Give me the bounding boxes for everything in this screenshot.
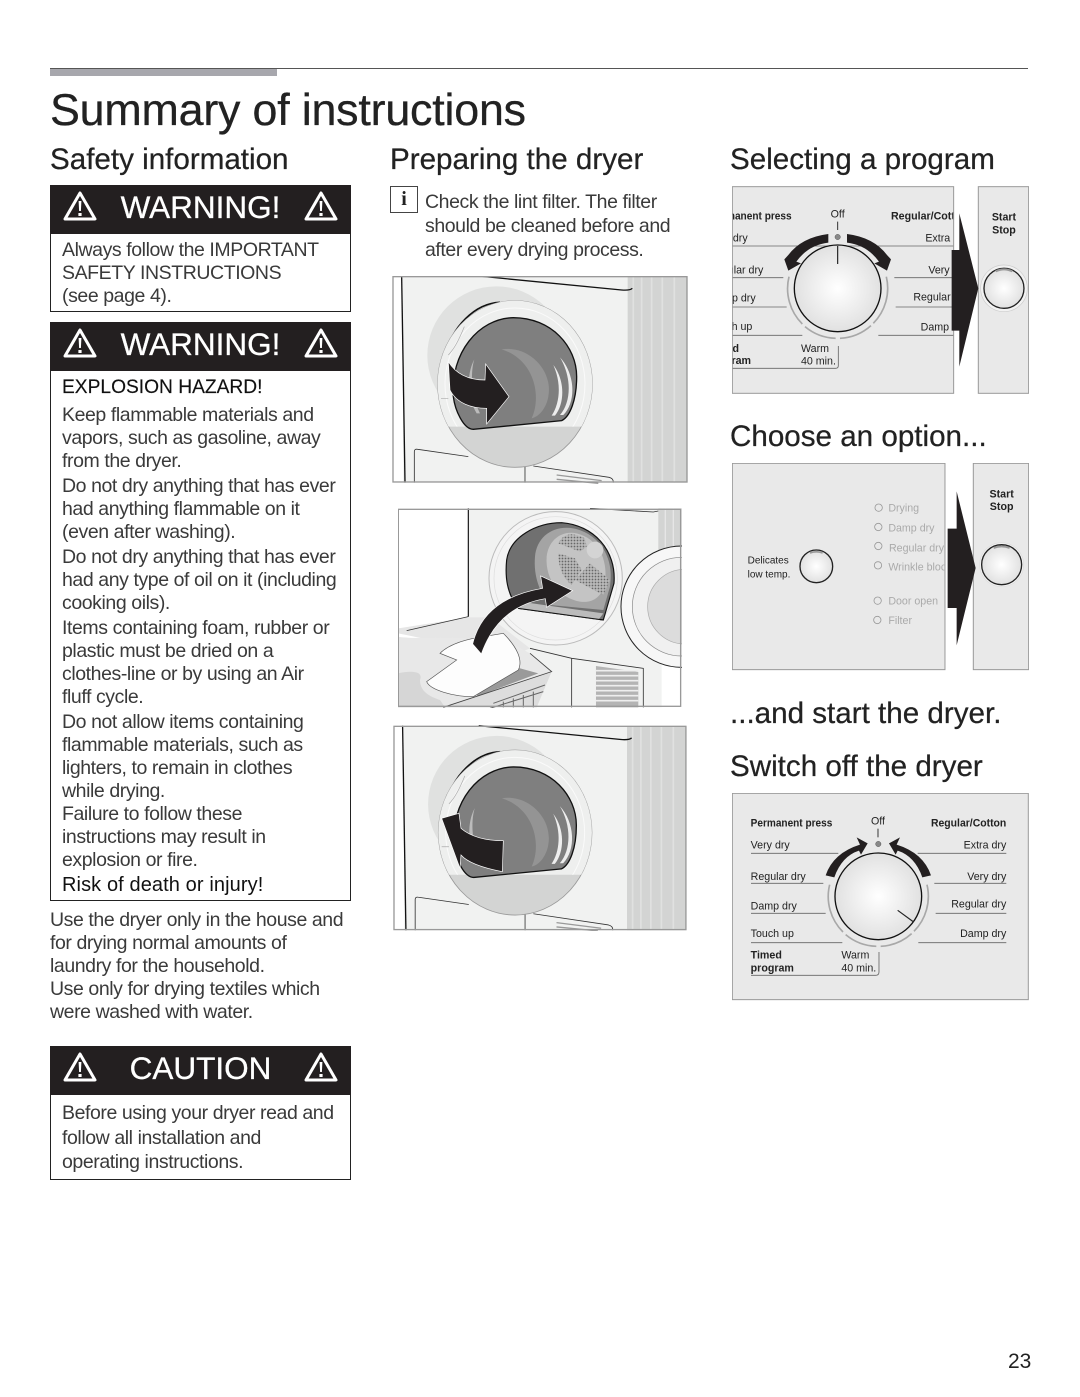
- paragraph: flammable materials: Keep flammable materials and: [62, 404, 314, 426]
- paragraph: flammable on it: had anything flammable on it: [62, 498, 300, 520]
- paragraph: flammable on it: Do not dry anything that has ever: [62, 475, 335, 497]
- panel: explosion hazard warning: [50, 322, 351, 901]
- panel: selecting a program control: [732, 186, 1029, 394]
- paragraph: oil: [62, 546, 336, 614]
- text block: intended use: laundry for the household.: [50, 955, 265, 977]
- text block: lint filter: Check the lint filter. The filter: [425, 191, 657, 213]
- text block: lint filter: after every drying process.: [425, 239, 643, 261]
- panel: switch off control: Permanent press: [751, 818, 832, 830]
- paragraph: failure: instructions may result in: [62, 826, 266, 848]
- panel: switch off control: 40 min.: [841, 962, 876, 974]
- warning text: SAFETY INSTRUCTIONS: [62, 262, 281, 284]
- paragraph: oil: had any type of oil on it (including: [62, 569, 336, 591]
- paragraph: lighters: Do not allow items containing: [62, 711, 303, 733]
- dial panel: Regular dry: [913, 292, 969, 304]
- panel: switch off control: program: [751, 962, 794, 974]
- paragraph: foam and rubber: plastic must be dried on a: [62, 640, 273, 662]
- paragraph: foam and rubber: Items containing foam, rubber or: [62, 617, 329, 639]
- panel: option control: Regular dry: [889, 543, 945, 555]
- caution text: follow all installation and: [62, 1126, 261, 1148]
- heading: safety information: Safety information: [50, 143, 289, 176]
- paragraph: lighters: [62, 711, 303, 802]
- heading: preparing the dryer: Preparing the dryer: [390, 143, 643, 176]
- heading: choose an option: Choose an option...: [730, 420, 987, 453]
- panel: switch off control: Very dry: [967, 871, 1007, 883]
- caution text: operating instructions.: [62, 1151, 243, 1173]
- caution header: [50, 1046, 351, 1095]
- text block: lint filter: [425, 191, 670, 261]
- arrow: right: [448, 362, 509, 424]
- panel: switch off control: Damp dry: [751, 900, 798, 912]
- arrow: left: [442, 813, 503, 872]
- panel: switch off control: Touch up: [751, 928, 794, 940]
- caution header: CAUTION: [130, 1050, 271, 1086]
- warning text: [62, 239, 319, 307]
- paragraph: failure: [62, 803, 266, 871]
- caution text: [62, 1102, 334, 1173]
- paragraph: oil: Do not dry anything that has ever: [62, 546, 335, 568]
- text block: lint filter: should be cleaned before and: [425, 215, 670, 237]
- paragraph: failure: Failure to follow these: [62, 803, 242, 825]
- paragraph: flammable materials: [62, 404, 321, 472]
- text block: intended use: Use the dryer only in the house and: [50, 909, 343, 931]
- paragraph: lighters: flammable materials, such as: [62, 734, 303, 756]
- panel: option control: Filter: [888, 615, 912, 627]
- panel: option control: Damp dry: [888, 522, 935, 534]
- panel: switch off control: Timed: [751, 949, 782, 961]
- text block: intended use: Use only for drying textiles which: [50, 978, 320, 1000]
- heading: and start the dryer: ...and start the dryer.: [730, 697, 1001, 730]
- panel: switch off control: [732, 793, 1029, 1000]
- panel: switch off control: Regular dry: [751, 871, 806, 883]
- paragraph: lighters: lighters, to remain in clothes: [62, 757, 292, 779]
- paragraph: foam and rubber: fluff cycle.: [62, 686, 143, 708]
- panel: switch off control: Damp dry: [960, 928, 1007, 940]
- panel: option control: Delicates: [748, 555, 789, 566]
- illustration: loading laundry: [398, 508, 682, 708]
- panel: selecting a program control: Start: [992, 212, 1017, 224]
- page number: 23: [1008, 1350, 1031, 1373]
- dial panel: Very dry: [928, 264, 968, 276]
- panel: caution: [50, 1046, 351, 1180]
- heading: switch off the dryer: Switch off the dryer: [730, 750, 983, 783]
- warning text: Always follow the IMPORTANT: [62, 239, 319, 261]
- illustration: open door, arrow to the right: [392, 276, 688, 484]
- dial panel: Extra dry: [925, 233, 969, 245]
- panel: option control: Door open: [888, 596, 938, 608]
- panel: switch off control: Warm: [841, 949, 869, 961]
- dial panel: Regular/Cotton: [891, 210, 968, 222]
- warning header: WARNING!: [121, 326, 280, 362]
- risk of death: Risk of death or injury!: [62, 874, 263, 896]
- illustration: closing door, arrow to the left: [393, 725, 687, 931]
- dial panel: Damp dry: [921, 322, 968, 334]
- panel: switch off control: Regular dry: [951, 898, 1007, 910]
- panel: switch off control: Very dry: [751, 840, 790, 852]
- arrow: to start: [952, 213, 978, 367]
- panel: option control: Stop: [990, 501, 1014, 513]
- arrow: to start: [948, 491, 976, 645]
- top rule: [50, 68, 1028, 76]
- dial panel: Warm: [801, 343, 829, 355]
- panel: switch off control: Off: [871, 816, 885, 828]
- warning header: [50, 322, 351, 371]
- warning text: (see page 4).: [62, 285, 171, 307]
- start panel: [978, 187, 1029, 393]
- text block: intended use: [50, 909, 343, 1023]
- paragraph: flammable on it: (even after washing).: [62, 521, 235, 543]
- warning header: [50, 185, 351, 234]
- title: Summary of instructions: [50, 85, 526, 135]
- paragraph: lighters: while drying.: [62, 780, 165, 802]
- panel: switch off control: Regular/Cotton: [931, 818, 1006, 830]
- paragraph: flammable on it: [62, 475, 336, 543]
- explosion hazard heading: EXPLOSION HAZARD!: [62, 377, 262, 398]
- text block: intended use: were washed with water.: [50, 1001, 253, 1023]
- panel: warning 1: [50, 185, 351, 312]
- panel: option control: Start: [989, 488, 1014, 500]
- panel: switch off control: Extra dry: [964, 840, 1007, 852]
- heading: selecting a program: Selecting a program: [730, 143, 995, 176]
- panel: option control: [732, 463, 1029, 670]
- icon: info box: i: [401, 188, 407, 210]
- text block: intended use: for drying normal amounts of: [50, 932, 286, 954]
- panel: selecting a program control: Stop: [992, 224, 1016, 236]
- icon: info box: [390, 186, 418, 213]
- panel: option control: Drying: [888, 502, 919, 514]
- dial panel: 40 min.: [801, 355, 836, 367]
- dial panel: [732, 187, 969, 393]
- caution text: Before using your dryer read and: [62, 1102, 334, 1124]
- panel: option control: Wrinkle block: [888, 562, 952, 574]
- warning header: WARNING!: [121, 189, 280, 225]
- dial panel: Off: [831, 209, 845, 221]
- paragraph: flammable materials: vapors, such as gasoline, away: [62, 427, 320, 449]
- paragraph: foam and rubber: clothes-line or by using an Air: [62, 663, 304, 685]
- paragraph: foam and rubber: [62, 617, 330, 708]
- arrow: into drum: [473, 576, 573, 654]
- panel: option control: low temp.: [748, 570, 790, 581]
- paragraph: failure: explosion or fire.: [62, 849, 198, 871]
- paragraph: flammable materials: from the dryer.: [62, 450, 181, 472]
- paragraph: oil: cooking oils).: [62, 592, 170, 614]
